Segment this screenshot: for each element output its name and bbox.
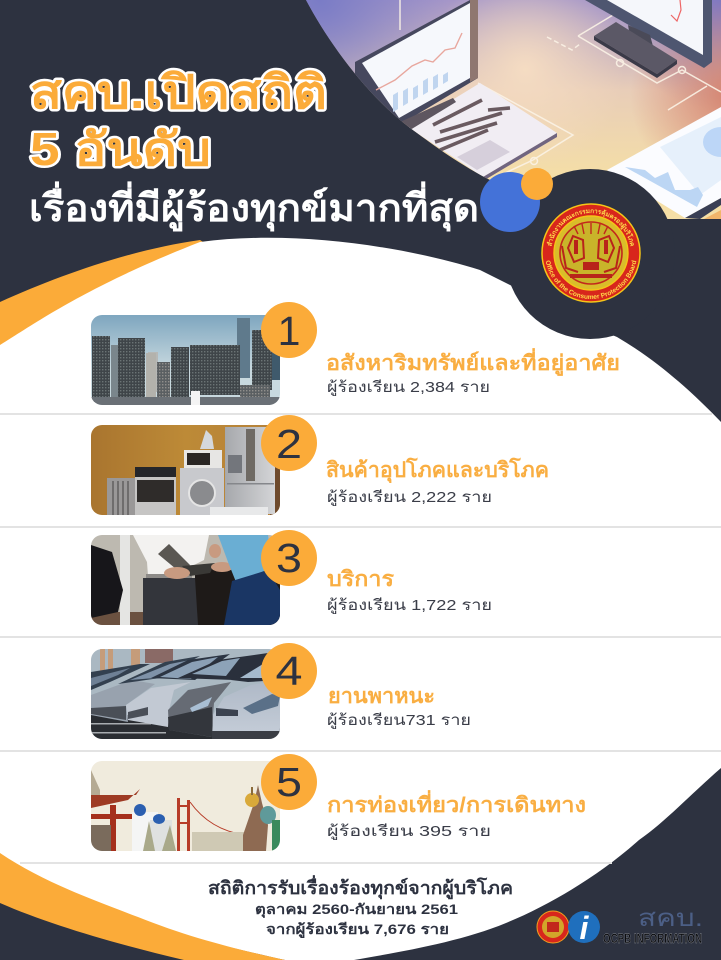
footer statistics note: ตุลาคม 2560-กันยายน 2561 xyxy=(255,901,458,918)
ranking item 2 text: สินค้าอุปโภคและบริโภค xyxy=(326,457,549,484)
row dividers xyxy=(0,413,721,864)
seal: Office of the Consumer Protection Board: สำนักงานคณะกรรมการคุ้มครองผู้บริโภค xyxy=(546,209,634,246)
logo: info badge xyxy=(568,910,600,946)
photo 5: world landmarks xyxy=(91,761,280,851)
logo: OCPB seal small xyxy=(537,911,569,943)
ranking item 3 text: ผู้ร้องเรียน 1,722 ราย xyxy=(327,597,492,614)
network lines xyxy=(400,0,721,180)
ranking item 4 text xyxy=(327,685,471,729)
ranking item 5 text: ผู้ร้องเรียน 395 ราย xyxy=(327,823,491,840)
ranking item 2 text: ผู้ร้องเรียน 2,222 ราย xyxy=(327,489,492,506)
logo: OCPB wordmark xyxy=(603,905,703,946)
ranking item 4 text: ยานพาหนะ xyxy=(328,685,435,708)
badge: number 3 xyxy=(261,530,317,586)
photo 4: row of cars xyxy=(91,649,280,739)
badge: number 4: 4 xyxy=(276,648,302,694)
title: 5 อันดับ xyxy=(30,123,211,175)
ranking item 5 text: การท่องเที่ยว/การเดินทาง xyxy=(327,789,586,817)
ranking item 5 text xyxy=(327,789,586,840)
title: สคบ.เปิดสถิติ xyxy=(30,66,327,118)
ranking item 1 text: ผู้ร้องเรียน 2,384 ราย xyxy=(327,379,490,396)
photo 3: people in business meeting xyxy=(91,535,280,625)
footer statistics note xyxy=(208,875,513,938)
badge: number 3: 3 xyxy=(276,535,302,581)
blue decorative circle xyxy=(480,172,540,232)
badge: number 5: 5 xyxy=(276,759,302,805)
photo 2: home appliances xyxy=(91,425,280,515)
ranking item 1 text: อสังหาริมทรัพย์และที่อยู่อาศัย xyxy=(326,347,620,377)
badge: number 4 xyxy=(261,643,317,699)
ranking item 1 text xyxy=(326,347,620,396)
badge: number 1: 1 xyxy=(278,308,300,354)
photo 1: city towers xyxy=(91,315,280,405)
logo: OCPB wordmark: สคบ. xyxy=(638,905,703,932)
footer statistics note: จากผู้ร้องเรียน 7,676 ราย xyxy=(266,921,449,938)
badge: number 2 xyxy=(261,415,317,471)
white content area xyxy=(0,238,721,960)
logo: info badge: i xyxy=(580,910,590,946)
title: เรื่องที่มีผู้ร้องทุกข์มากที่สุด xyxy=(29,181,479,232)
orange swoosh bottom left xyxy=(0,853,285,960)
badge: number 1 xyxy=(261,302,317,358)
illustration: laptop, monitor and tablet dashboard xyxy=(300,0,721,225)
ranking item 4 text: ผู้ร้องเรียน731 ราย xyxy=(327,712,471,729)
orange swoosh top left xyxy=(0,240,230,345)
seal: Office of the Consumer Protection Board xyxy=(541,203,641,303)
badge: number 5 xyxy=(261,754,317,810)
seal: Office of the Consumer Protection Board: Office of the Consumer Protection Board xyxy=(546,260,636,299)
badge: number 2: 2 xyxy=(276,421,302,467)
ranking item 2 text xyxy=(326,457,549,506)
title xyxy=(29,66,479,232)
ranking item 3 text: บริการ xyxy=(327,568,395,591)
icon: tablet with chart xyxy=(607,107,721,219)
footer statistics note: สถิติการรับเรื่องร้องทุกข์จากผู้บริโภค xyxy=(208,875,513,900)
icon: monitor xyxy=(585,0,712,78)
icon: laptop xyxy=(355,0,557,181)
ranking item 3 text xyxy=(327,568,492,614)
dark circle behind seal xyxy=(505,169,675,339)
orange decorative circle xyxy=(521,168,553,200)
